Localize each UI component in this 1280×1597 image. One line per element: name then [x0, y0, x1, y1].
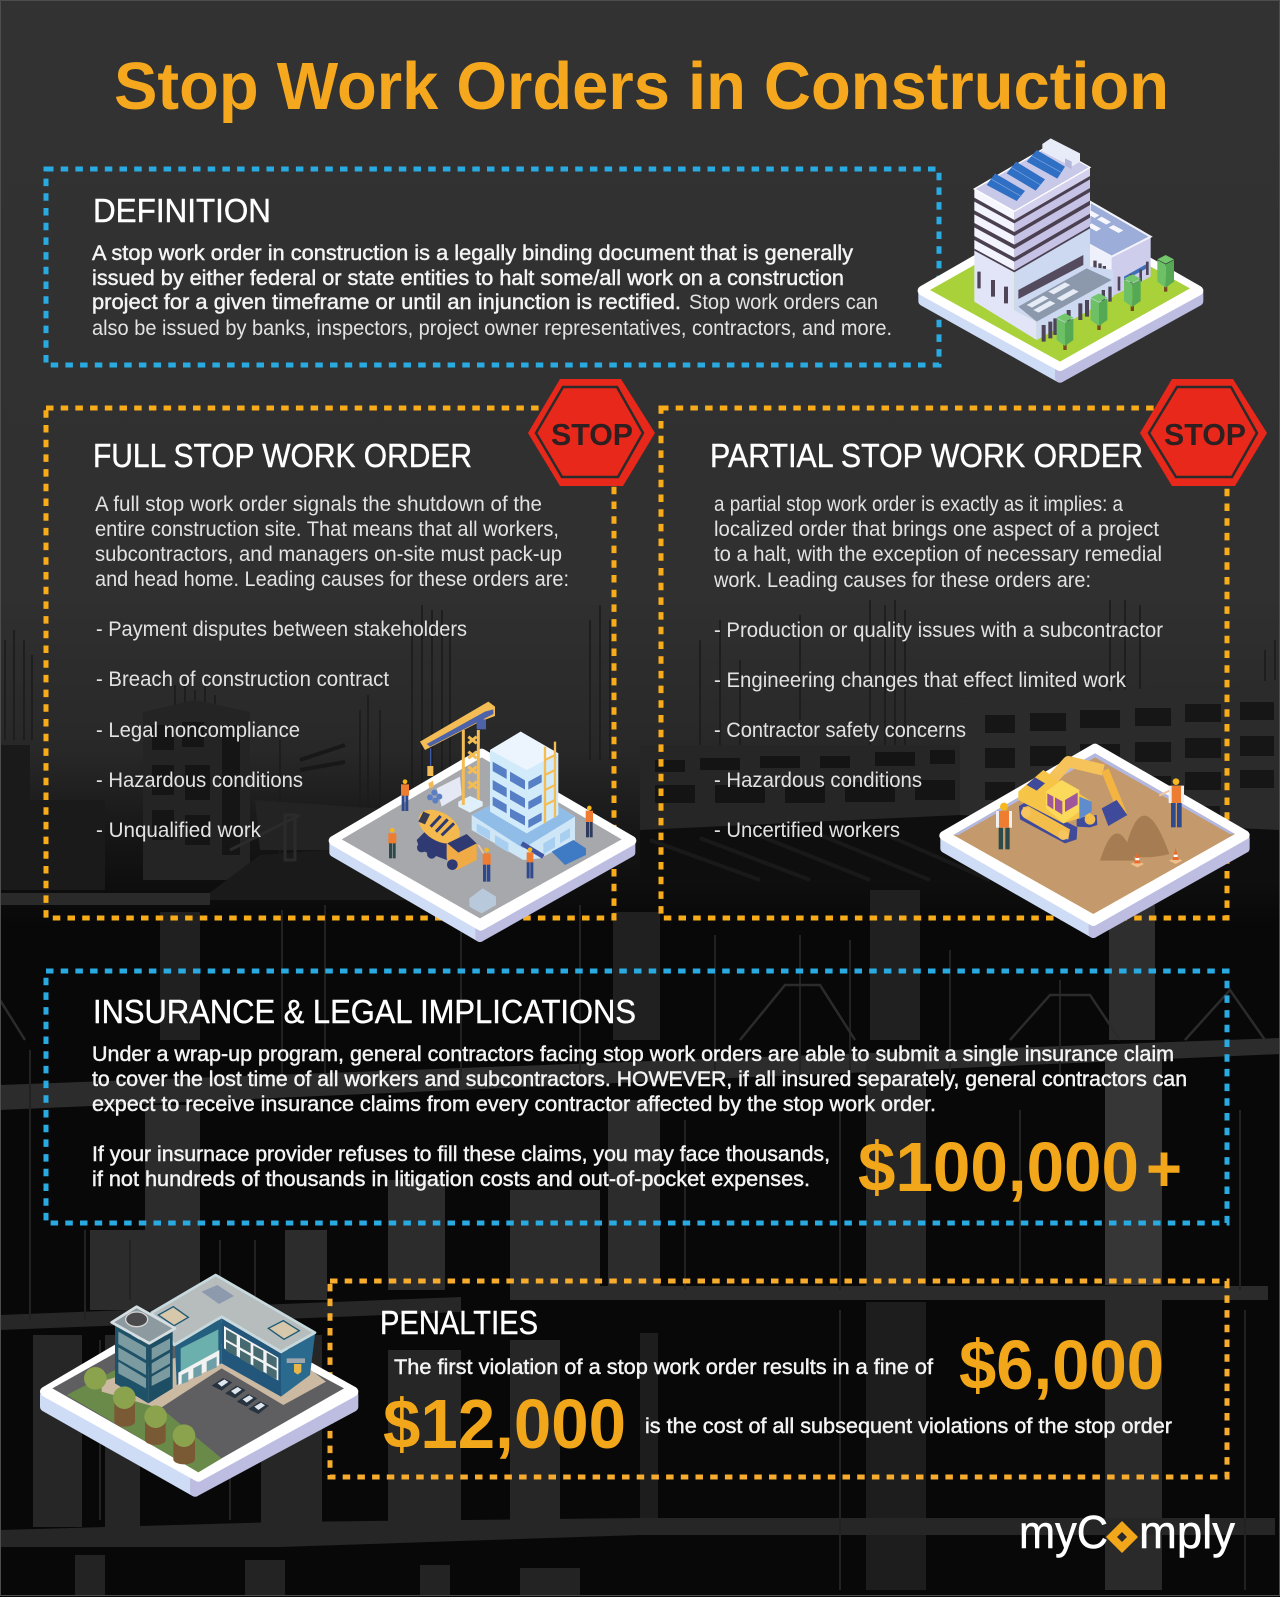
heading: definition: DEFINITION — [93, 192, 271, 229]
callout: $12,000: $12,000 — [383, 1385, 626, 1463]
worker — [478, 845, 491, 882]
text block: litigation costs — [92, 1143, 830, 1191]
icon: stop sign — [528, 379, 655, 486]
text block: definition: project for a given timeframe or until an injunction is rectified. — [92, 291, 681, 314]
panel: insurance and legal implications — [46, 971, 1227, 1223]
icon: isometric construction site — [333, 702, 632, 937]
tree — [1124, 274, 1141, 311]
heading: penalties: PENALTIES — [380, 1304, 538, 1341]
callout: $6,000: $6,000 — [959, 1326, 1164, 1404]
logo: myComply: mply — [1139, 1506, 1235, 1558]
list: full stop causes: - Unqualified work — [96, 819, 261, 842]
list: full stop causes: - Hazardous conditions — [96, 769, 303, 792]
list: partial stop causes: - Production or quality issues with a subcontractor — [714, 619, 1163, 642]
tree — [1057, 313, 1073, 350]
text block: definition: also be issued by banks, inspectors, project owner representatives, contractors, and more. — [92, 317, 892, 340]
list: full stop causes: - Payment disputes between stakeholders — [96, 618, 467, 641]
police car — [248, 1401, 269, 1414]
panel: full stop work order — [46, 379, 655, 937]
list: full stop causes: - Legal noncompliance — [96, 719, 300, 742]
worker — [1159, 778, 1184, 827]
panel: definition — [46, 138, 1198, 378]
callout: $100,000+: + — [1146, 1131, 1182, 1205]
text block: partial stop description: a partial stop work order is exactly as it implies: a — [714, 493, 1123, 516]
worker — [388, 828, 396, 858]
text block: partial stop description: to a halt, with the exception of necessary remedial — [714, 543, 1162, 566]
traffic cone — [1131, 851, 1144, 867]
worker — [527, 847, 533, 878]
text block: full stop description — [95, 493, 569, 591]
text block: wrap-up program: to cover the lost time of all workers and subcontractors. HOWEVER, if all insured separately, general contractors can — [92, 1068, 1187, 1091]
icon: stop sign — [1140, 379, 1267, 486]
tree — [1157, 255, 1174, 292]
heading: partial stop work order: PARTIAL STOP WORK ORDER — [710, 437, 1143, 474]
list: partial stop causes: - Contractor safety concerns — [714, 719, 966, 742]
icon: isometric police station — [45, 1275, 353, 1492]
text block: partial stop description: localized order that brings one aspect of a project — [714, 518, 1159, 541]
list: full stop causes: - Breach of construction contract — [96, 668, 389, 691]
text block: litigation costs: if not hundreds of thousands in litigation costs and out-of-pocket expenses. — [92, 1168, 810, 1191]
police car — [212, 1378, 232, 1391]
title: Stop Work Orders in Construction — [114, 49, 1169, 124]
panel: penalties — [45, 1275, 1227, 1492]
callout: $100,000+: $100,000 — [858, 1128, 1139, 1206]
worker — [996, 803, 1012, 849]
text block: wrap-up program — [92, 1043, 1187, 1116]
icon: isometric office building — [923, 138, 1198, 378]
logo: myComply — [1019, 1506, 1235, 1558]
text block: full stop description: A full stop work order signals the shutdown of the — [95, 493, 542, 516]
police car — [225, 1386, 246, 1398]
text block: wrap-up program: expect to receive insurance claims from every contractor affected by the stop work order. — [92, 1093, 936, 1116]
icon: stop sign: STOP — [551, 417, 633, 452]
text block: partial stop description: work. Leading causes for these orders are: — [713, 569, 1091, 592]
text block: definition — [92, 242, 892, 340]
text block: full stop description: and head home. Leading causes for these orders are: — [95, 568, 569, 591]
text block: litigation costs: If your insurnace provider refuses to fill these claims, you may face thousands, — [92, 1143, 830, 1166]
icon: stop sign: STOP — [1164, 417, 1246, 452]
text block: definition: Stop work orders can — [689, 291, 878, 314]
text block: definition: A stop work order in construction is a legally binding document that is generally — [92, 242, 854, 265]
heading: insurance and legal: INSURANCE & LEGAL IMPLICATIONS — [93, 993, 636, 1030]
text: first violation: The first violation of a stop work order results in a fine of — [394, 1356, 933, 1379]
text block: definition: issued by either federal or state entities to halt some/all work on a construction — [92, 267, 844, 290]
worker — [586, 806, 593, 837]
traffic cone — [1169, 848, 1182, 864]
text block: full stop description: entire construction site. That means that all workers, — [95, 518, 559, 541]
icon: isometric excavator site — [944, 748, 1245, 933]
worker — [401, 779, 409, 811]
list: partial stop causes: - Uncertified workers — [714, 819, 900, 842]
list: full stop causes — [96, 618, 467, 842]
tree — [1091, 293, 1107, 330]
text block: partial stop description — [713, 493, 1162, 592]
heading: full stop work order: FULL STOP WORK ORDER — [93, 437, 472, 474]
text block: wrap-up program: Under a wrap-up program, general contractors facing stop work orders are able to submit a single insurance claim — [92, 1043, 1174, 1066]
text block: full stop description: subcontractors, and managers on-site must pack-up — [95, 543, 562, 566]
text: subsequent violations: is the cost of all subsequent violations of the stop order — [645, 1415, 1172, 1438]
police car — [237, 1394, 257, 1407]
list: partial stop causes: - Hazardous conditions — [714, 769, 922, 792]
panel: partial stop work order — [661, 379, 1267, 933]
list: partial stop causes — [714, 619, 1163, 842]
list: partial stop causes: - Engineering changes that effect limited work — [714, 669, 1126, 692]
logo: myComply: myC — [1019, 1506, 1108, 1558]
